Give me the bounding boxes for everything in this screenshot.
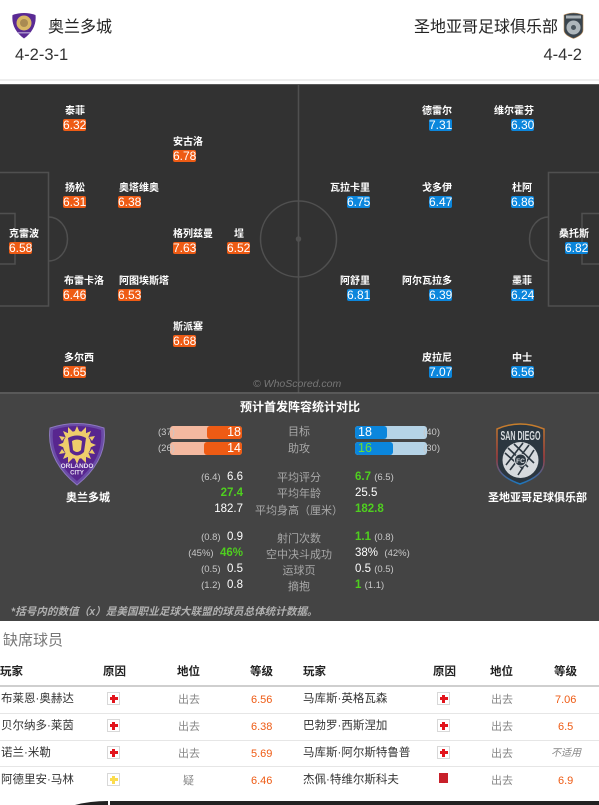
player: 阿尔瓦拉多 [402,274,452,302]
section heading: 缺席球员 [3,632,63,649]
home stat values: 27.4 [221,487,243,499]
bar: away goals: (40) [423,427,440,438]
stat labels: 目标 [288,426,310,438]
home missing rows: 布莱恩·奥赫达 [1,693,74,705]
home missing rows: 6.56 [251,694,272,706]
player: 扬松: 6.31 [63,195,86,209]
home missing rows: 贝尔纳多·莱茵 [1,720,74,732]
player: 墨菲: 墨菲 [512,276,532,286]
player: 皮拉尼: 7.07 [429,365,452,379]
bar: away goals [355,425,440,439]
player: 泰菲 [63,105,86,132]
home team label: 奥兰多城 [66,492,110,504]
player: 桑托斯 [559,228,589,255]
player: 布雷卡洛: 6.46 [63,288,86,302]
table headers: 玩家 [303,666,326,678]
icon: Orlando City crest: ORLANDO [61,463,93,470]
footnote: *括号内的数值（x）是美国职业足球大联盟的球员总体统计数据。 [11,606,318,618]
stat labels: 平均身高（厘米） [255,505,343,517]
player: 奥塔维奥: 6.38 [118,195,141,209]
player: 埕: 6.52 [227,241,250,255]
away team name: 圣地亚哥足球俱乐部 [414,19,558,36]
player: 斯派塞: 6.68 [173,334,196,348]
player: 安古洛 [173,136,203,163]
away missing rows: 出去 [491,694,513,706]
home players [9,105,250,379]
player: 皮拉尼: 皮拉尼 [422,352,452,364]
away missing rows: 马库斯·阿尔斯特鲁普 [303,747,410,759]
player: 阿图埃斯塔: 阿图埃斯塔 [119,276,169,286]
away missing rows: 杰佩·特维尔斯科夫 [303,774,399,786]
table headers: 原因 [433,666,456,678]
player: 克雷波 [9,228,39,255]
player: 格列兹曼: 7.63 [173,241,196,255]
player: 中士 [511,352,534,379]
home missing rows: 出去 [178,721,200,733]
stat labels: 助攻 [288,443,310,455]
player: 阿舒里: 阿舒里 [340,276,370,286]
table headers [0,665,577,678]
player: 泰菲: 6.32 [63,118,86,132]
player: 阿舒里: 6.81 [347,288,370,302]
bar: home goals: 18 [227,425,241,439]
player: 扬松 [63,182,86,209]
player: 安古洛: 安古洛 [173,136,203,148]
player: 克雷波: 克雷波 [9,228,39,240]
away stat values: 182.8 [355,503,384,515]
home stat values: (6.4) 6.6 [201,471,243,483]
away missing rows: 6.9 [558,775,573,787]
player: 埕 [227,228,250,255]
player: 戈多伊: 6.47 [429,195,452,209]
bar: home goals [158,425,242,439]
panel: missing players [0,621,599,805]
player: 戈多伊: 戈多伊 [422,182,452,194]
icon: San Diego small crest [564,12,584,39]
player: 扬松: 扬松 [65,182,85,194]
stats title: 预计首发阵容统计对比 [240,400,360,414]
player: 阿尔瓦拉多: 阿尔瓦拉多 [402,276,452,286]
player: 德雷尔 [422,105,452,132]
player: 布雷卡洛 [63,275,104,302]
player: 斯派塞: 斯派塞 [173,322,203,332]
home missing rows: 6.46 [251,775,272,787]
away missing rows: 出去 [491,775,513,787]
table: missing players [0,685,599,767]
player: 多尔西 [63,352,94,379]
player: 墨菲: 6.24 [511,288,534,302]
away missing rows [303,692,582,787]
bar: away goals: 18 [358,425,372,439]
bar: home assists [158,441,242,455]
player: 桑托斯: 桑托斯 [559,228,589,240]
home missing rows: 疑 [183,775,194,787]
player: 阿图埃斯塔: 6.53 [118,288,141,302]
home stat values [188,471,243,591]
stat labels: 平均评分 [277,472,321,484]
away missing rows: 7.06 [555,694,576,706]
home formation: 4-2-3-1 [15,46,68,64]
player: 埕: 埕 [234,228,244,240]
player: 瓦拉卡里 [330,182,370,209]
away stat values: 0.5 (0.5) [355,563,394,575]
away missing rows: 巴勃罗·西斯涅加 [303,720,387,732]
away missing rows: 马库斯·英格瓦森 [303,693,387,705]
home stat values: (45%) 46% [188,547,243,559]
icon: Orlando City crest [49,423,105,486]
player: 布雷卡洛: 布雷卡洛 [64,276,104,286]
player: 阿尔瓦拉多: 6.39 [429,288,452,302]
panel: lineup stats comparison [0,394,599,621]
bottom strip [0,800,599,805]
stat labels: 射门次数 [277,533,321,545]
player: 杜阿: 杜阿 [512,182,532,194]
away stat values: 1 (1.1) [355,579,384,591]
player: 维尔霍芬: 6.30 [511,118,534,132]
bar: home goals: (37) [158,427,175,438]
table headers: 原因 [103,666,126,678]
stat labels: 摘抱 [288,581,310,593]
away formation: 4-4-2 [543,46,582,64]
home stat values: (0.8) 0.9 [201,531,243,543]
icon: San Diego crest [496,423,545,485]
player: 克雷波: 6.58 [9,241,32,255]
away stat values [355,471,410,591]
stat labels [255,426,343,593]
watermark: © WhoScored.com [253,378,341,390]
player: 多尔西: 多尔西 [64,352,94,364]
player: 阿图埃斯塔 [118,275,169,302]
player: 德雷尔: 7.31 [429,118,452,132]
player: 中士: 6.56 [511,365,534,379]
home stat values: 182.7 [214,503,243,515]
player: 安古洛: 6.78 [173,149,196,163]
table headers: 等级 [554,666,577,678]
player: 斯派塞 [173,320,203,348]
player: 奥塔维奥: 奥塔维奥 [119,182,159,194]
player: 格列兹曼: 格列兹曼 [173,228,213,240]
away stat values: 38% (42%) [355,547,410,559]
away missing rows: 不适用 [551,748,581,759]
away stat values: 1.1 (0.8) [355,531,394,543]
player: 德雷尔: 德雷尔 [422,106,452,116]
bar: home assists: (26) [158,443,175,454]
home missing rows: 出去 [178,748,200,760]
home stat values: (1.2) 0.8 [201,579,243,591]
player: 中士: 中士 [512,352,532,364]
player: 杜阿: 6.86 [511,195,534,209]
table headers: 玩家 [0,666,23,678]
home missing rows: 6.38 [251,721,272,733]
player: 多尔西: 6.65 [63,365,86,379]
player: 瓦拉卡里: 瓦拉卡里 [330,182,370,194]
player: 维尔霍芬: 维尔霍芬 [494,106,534,116]
bar: home assists: 14 [227,441,241,455]
bar: away assists [355,441,440,455]
away team label: 圣地亚哥足球俱乐部 [488,492,587,504]
stat labels: 运球页 [282,565,316,577]
bar: away assists: (30) [423,443,440,454]
away missing rows: 6.5 [558,721,573,733]
away players [330,105,589,379]
home missing rows: 出去 [178,694,200,706]
player: 戈多伊 [422,182,452,209]
away stat values: 25.5 [355,487,377,499]
icon: Orlando City crest: CITY [70,470,84,476]
stat labels: 平均年龄 [277,488,321,500]
player: 阿舒里 [340,275,370,302]
table headers: 地位 [490,666,513,678]
player: 皮拉尼 [422,352,452,379]
away missing rows: 出去 [491,721,513,733]
table headers: 等级 [250,666,273,678]
table headers: 地位 [177,666,200,678]
player: 奥塔维奥 [118,182,159,209]
header: teams and formations [0,0,599,84]
pitch markings [0,85,599,394]
home missing rows [1,692,272,787]
player: 格列兹曼 [173,228,213,255]
away stat values: 6.7 (6.5) [355,471,394,483]
player: 瓦拉卡里: 6.75 [347,195,370,209]
player: 泰菲: 泰菲 [65,106,85,116]
player: 维尔霍芬 [494,105,534,132]
icon: Orlando City small crest [12,13,36,38]
icon: San Diego crest: FC [516,458,525,465]
stat labels: 空中决斗成功 [266,549,332,561]
bar: away assists: 16 [358,441,372,455]
panel: pitch [0,84,599,394]
home missing rows: 阿德里安·马林 [1,774,74,786]
home team name: 奥兰多城 [48,19,112,36]
home missing rows: 5.69 [251,748,272,760]
player: 桑托斯: 6.82 [565,241,588,255]
home stat values: (0.5) 0.5 [201,563,243,575]
home missing rows: 诺兰·米勒 [1,747,51,759]
away missing rows: 出去 [491,748,513,760]
player: 墨菲 [511,275,534,302]
player: 杜阿 [511,182,534,209]
